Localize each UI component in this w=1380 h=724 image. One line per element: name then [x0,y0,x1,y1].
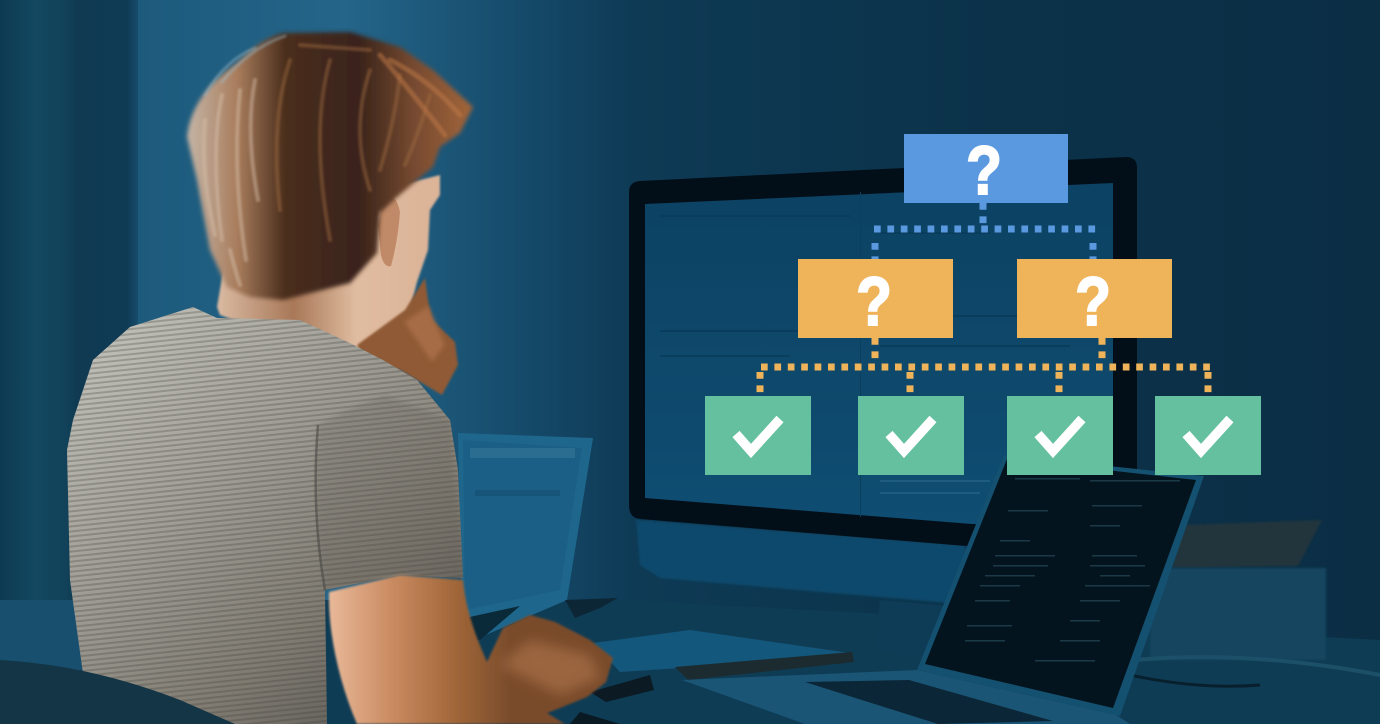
desk [0,520,1380,724]
person [0,32,613,724]
node: right question: ? [1075,263,1111,340]
node: check 2 [858,396,964,475]
front laptop [570,455,1204,724]
shirt [67,307,463,724]
monitor [629,157,1137,662]
hair strands [204,36,460,285]
arm and hand on keyboard [329,575,613,724]
chair [0,660,235,724]
node: check 1 [705,396,811,475]
hair [187,32,473,300]
node: root question: ? [966,132,1002,209]
neck and face [217,175,440,350]
node: left question [798,259,953,340]
papers [590,630,854,702]
connectors: orange [760,338,1211,396]
decision tree [705,132,1261,475]
ear [378,196,400,266]
hand at chin [357,278,458,395]
node: check 4 [1155,396,1261,475]
node: right question [1017,259,1172,340]
node: left question: ? [856,263,892,340]
connectors: blue [874,203,1096,259]
node: check 3 [1007,396,1113,475]
back laptop [458,433,618,643]
node: root question [904,132,1068,209]
